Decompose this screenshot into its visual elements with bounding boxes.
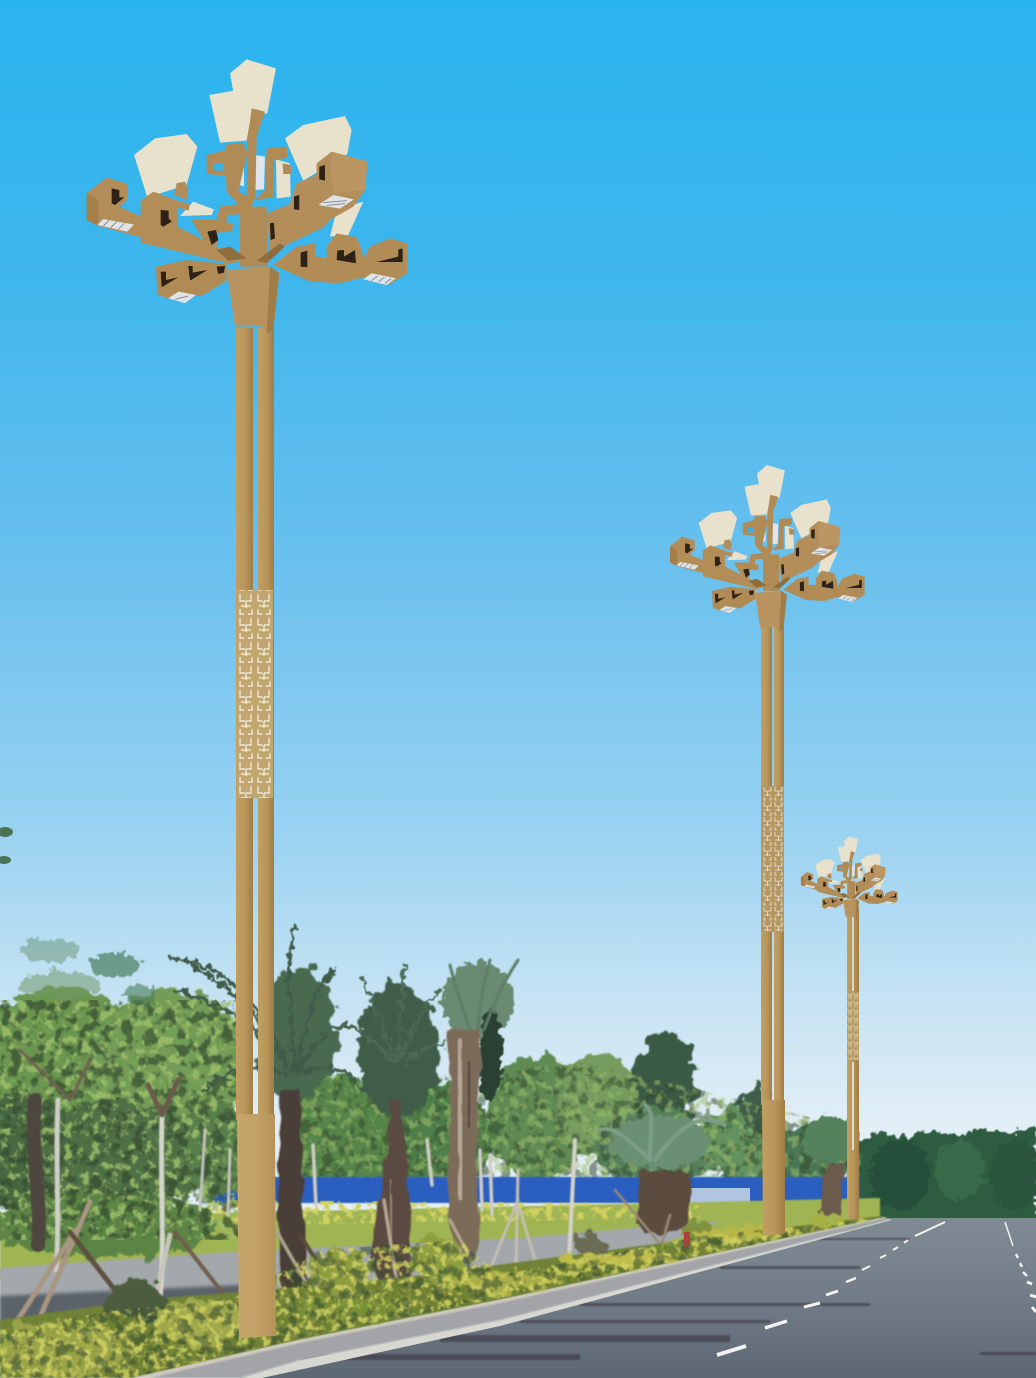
far post base [847,1150,859,1219]
road surface [240,1218,1036,1378]
lamp post: middle [670,465,865,1236]
palm: centre [330,965,445,1290]
lamp post: far [801,837,898,1219]
distant palms [600,1105,858,1235]
middle post shafts [761,625,784,1105]
tree trunks [20,1050,230,1300]
far post shafts [847,908,859,1153]
middle post decorative band [761,786,784,932]
small leaf at left edge [0,827,13,864]
tree stakes and slim trunks [6,1140,670,1342]
edge line [240,1219,892,1378]
lamp post: near [87,59,407,1338]
distant tree line, right of the road [855,1126,1036,1222]
palm: right [442,960,518,1266]
middle distance trees [285,1036,860,1200]
near post decorative band [237,590,273,798]
near post base [237,1114,276,1338]
far post decorative band [847,992,859,1060]
middle post base [762,1100,785,1236]
near post shafts [236,328,274,1120]
lane dashes [717,1222,1036,1355]
left foreground trees [0,938,255,1300]
middle lamp head [670,465,865,631]
median planting [0,1216,885,1378]
kerb [133,1217,889,1378]
pole shadows on road [300,1238,1036,1360]
near lamp head [87,59,407,333]
fire hydrant [684,1232,690,1246]
background grass, road and blue fence [0,1177,880,1330]
palm: left [168,925,365,1298]
far lamp head [801,837,898,919]
